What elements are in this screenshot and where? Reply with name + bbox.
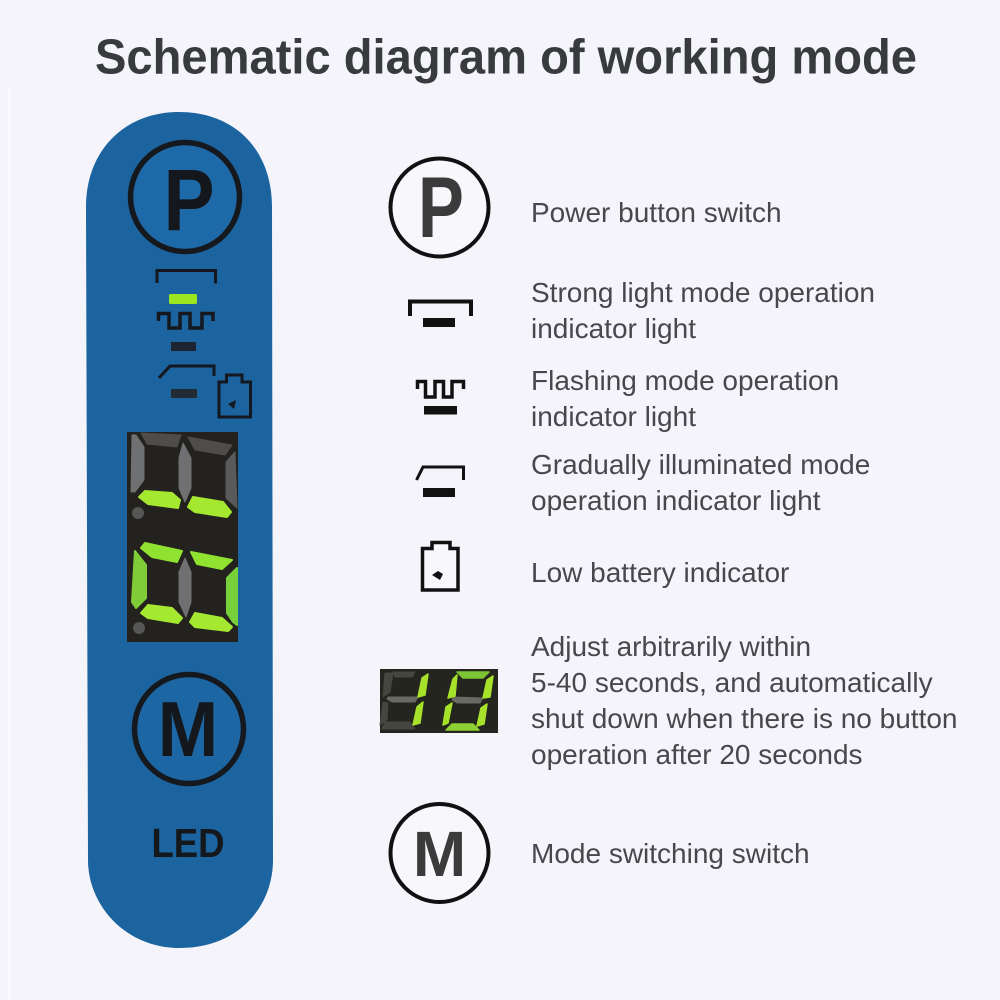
icon: low battery legend [422,542,458,590]
icon: power button legend: P [418,160,464,256]
display: strip two-digit LED [127,432,238,642]
text: strong light mode: Strong light mode operation [531,277,875,308]
text: mode switch: Mode switching switch [531,838,810,869]
icon: strip mode button: M [158,686,218,773]
icon: flashing mode legend [418,382,464,414]
panel: LED control strip [86,112,273,948]
text: strong light mode: indicator light [531,313,696,344]
display: legend LED reading 10 [380,669,498,733]
icon: strip gradual mode [159,366,214,398]
text: gradual mode: Gradually illuminated mode [531,449,870,480]
icon: strong light mode legend [410,302,471,327]
icon: strip power button: P [163,152,215,249]
icon: power button legend [390,158,488,256]
label: LED: LED [152,820,224,866]
icon: strip low battery [219,375,250,417]
icon: strip flashing mode [158,314,213,351]
text: power button: Power button switch [531,197,782,228]
text: timer adjustment: operation after 20 seconds [531,739,863,770]
text: timer adjustment: 5-40 seconds, and automatically [531,667,933,698]
icon: strip strong light mode [157,270,216,304]
text: timer adjustment: shut down when there is no button [531,703,958,734]
icon: strip mode button [134,674,244,784]
text: flashing mode: indicator light [531,401,696,432]
text: flashing mode: Flashing mode operation [531,365,839,396]
icon: mode switch legend [390,804,488,902]
icon: strip power button [130,142,240,252]
text: gradual mode: operation indicator light [531,485,821,516]
text: timer adjustment: Adjust arbitrarily within [531,631,811,662]
icon: mode switch legend: M [413,818,466,890]
text: low battery: Low battery indicator [531,557,789,588]
title: Schematic diagram of working mode [95,30,917,84]
icon: gradual mode legend [416,467,464,497]
